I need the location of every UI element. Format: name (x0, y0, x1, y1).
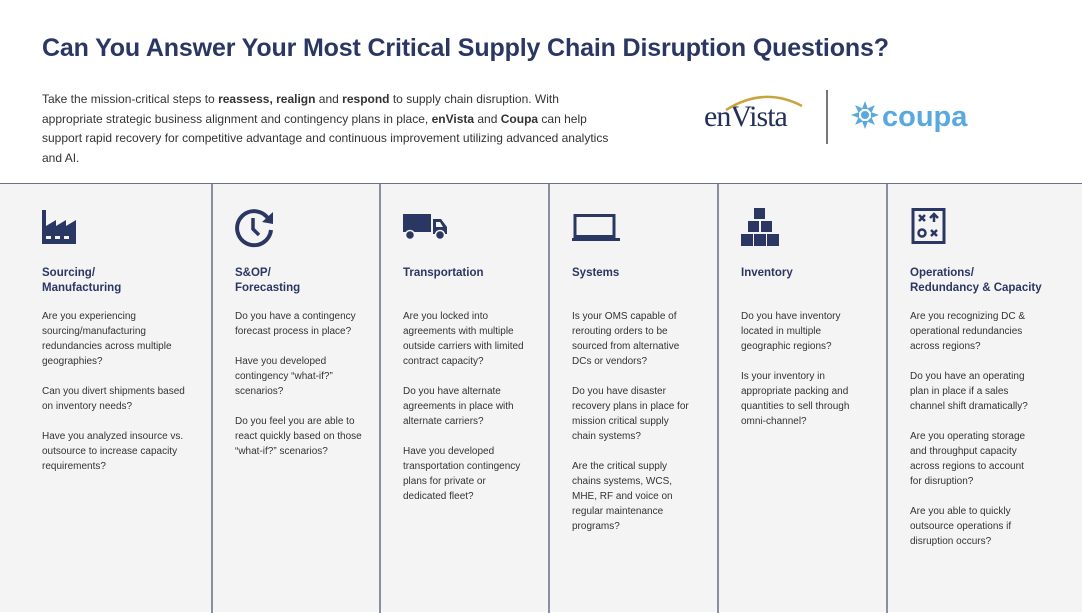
questions: Are you operating storage and throughput capacity across regions to account for disruption? (910, 431, 1025, 487)
heading (235, 267, 300, 294)
heading: Forecasting (235, 282, 300, 294)
heading (910, 267, 1042, 294)
questions: Do you have inventory located in multiple geographic regions? (741, 311, 841, 352)
intro text: support rapid recovery for competitive advantage and continuous improvement utilizing advanced analytics (42, 131, 608, 145)
questions (741, 311, 849, 427)
panel: inventory (741, 208, 849, 427)
logo: coupa: coupa (882, 101, 967, 133)
panel: S&OP (235, 209, 362, 457)
questions: Can you divert shipments based on inventory needs? (42, 386, 185, 412)
questions: Are you able to quickly outsource operations if disruption occurs? (910, 506, 1011, 547)
heading: Operations/ (910, 267, 974, 279)
questions: Do you have a contingency forecast process in place? (235, 311, 356, 337)
heading: Manufacturing (42, 282, 121, 294)
heading: Inventory (741, 267, 793, 279)
panel: transportation (403, 214, 524, 502)
questions: Do you have alternate agreements in place with alternate carriers? (403, 386, 514, 427)
heading: Transportation (403, 267, 484, 279)
questions: Are you locked into agreements with multiple outside carriers with limited contract capacity? (403, 311, 524, 367)
questions: Is your OMS capable of rerouting orders to be sourced from alternative DCs or vendors? (572, 311, 679, 367)
intro text: appropriate strategic business alignment and contingency plans in place, enVista and Coupa can help (42, 112, 587, 126)
heading: Systems (572, 267, 619, 279)
questions: Are you experiencing sourcing/manufacturing redundancies across multiple geographies? (42, 311, 172, 367)
icon: laptop (572, 214, 620, 241)
icon: playbook (912, 208, 946, 244)
questions: Have you developed contingency “what-if?” scenarios? (235, 356, 333, 397)
questions (572, 311, 689, 532)
heading: Sourcing/ (42, 267, 95, 279)
questions: Are you recognizing DC & operational redundancies across regions? (910, 311, 1025, 352)
logo: enVista: enVista (704, 100, 787, 133)
logos (704, 90, 968, 144)
questions (42, 311, 185, 472)
icon: truck (403, 214, 447, 239)
questions: Is your inventory in appropriate packing and quantities to sell through omni-channel? (741, 371, 849, 427)
icon: boxes (741, 208, 779, 246)
questions: Have you developed transportation contingency plans for private or dedicated fleet? (403, 446, 520, 502)
heading: Redundancy & Capacity (910, 282, 1042, 294)
icon: clock (235, 209, 273, 248)
heading: S&OP/ (235, 267, 271, 279)
questions: Do you have disaster recovery plans in place for mission critical supply chain systems? (572, 386, 689, 442)
questions (235, 311, 362, 457)
intro text (42, 92, 608, 164)
panel: operations (910, 208, 1042, 547)
intro text: Take the mission-critical steps to reassess, realign and respond to supply chain disruption. With (42, 92, 559, 106)
questions: Do you feel you are able to react quickly based on those “what-if?” scenarios? (235, 416, 362, 457)
icon: factory (42, 210, 76, 244)
questions (403, 311, 524, 502)
panel: systems (572, 214, 689, 532)
questions (910, 311, 1028, 547)
questions: Do you have an operating plan in place if a sales channel shift dramatically? (910, 371, 1028, 412)
divider (826, 90, 828, 144)
title: Can You Answer Your Most Critical Supply Chain Disruption Questions? (42, 34, 889, 62)
questions: Have you analyzed insource vs. outsource to increase capacity requirements? (42, 431, 183, 472)
panels (0, 183, 1082, 612)
intro text: and AI. (42, 150, 79, 164)
heading (42, 267, 121, 294)
panel: sourcing (42, 210, 185, 472)
questions: Are the critical supply chains systems, WCS, MHE, RF and voice on regular maintenance programs? (572, 461, 673, 532)
